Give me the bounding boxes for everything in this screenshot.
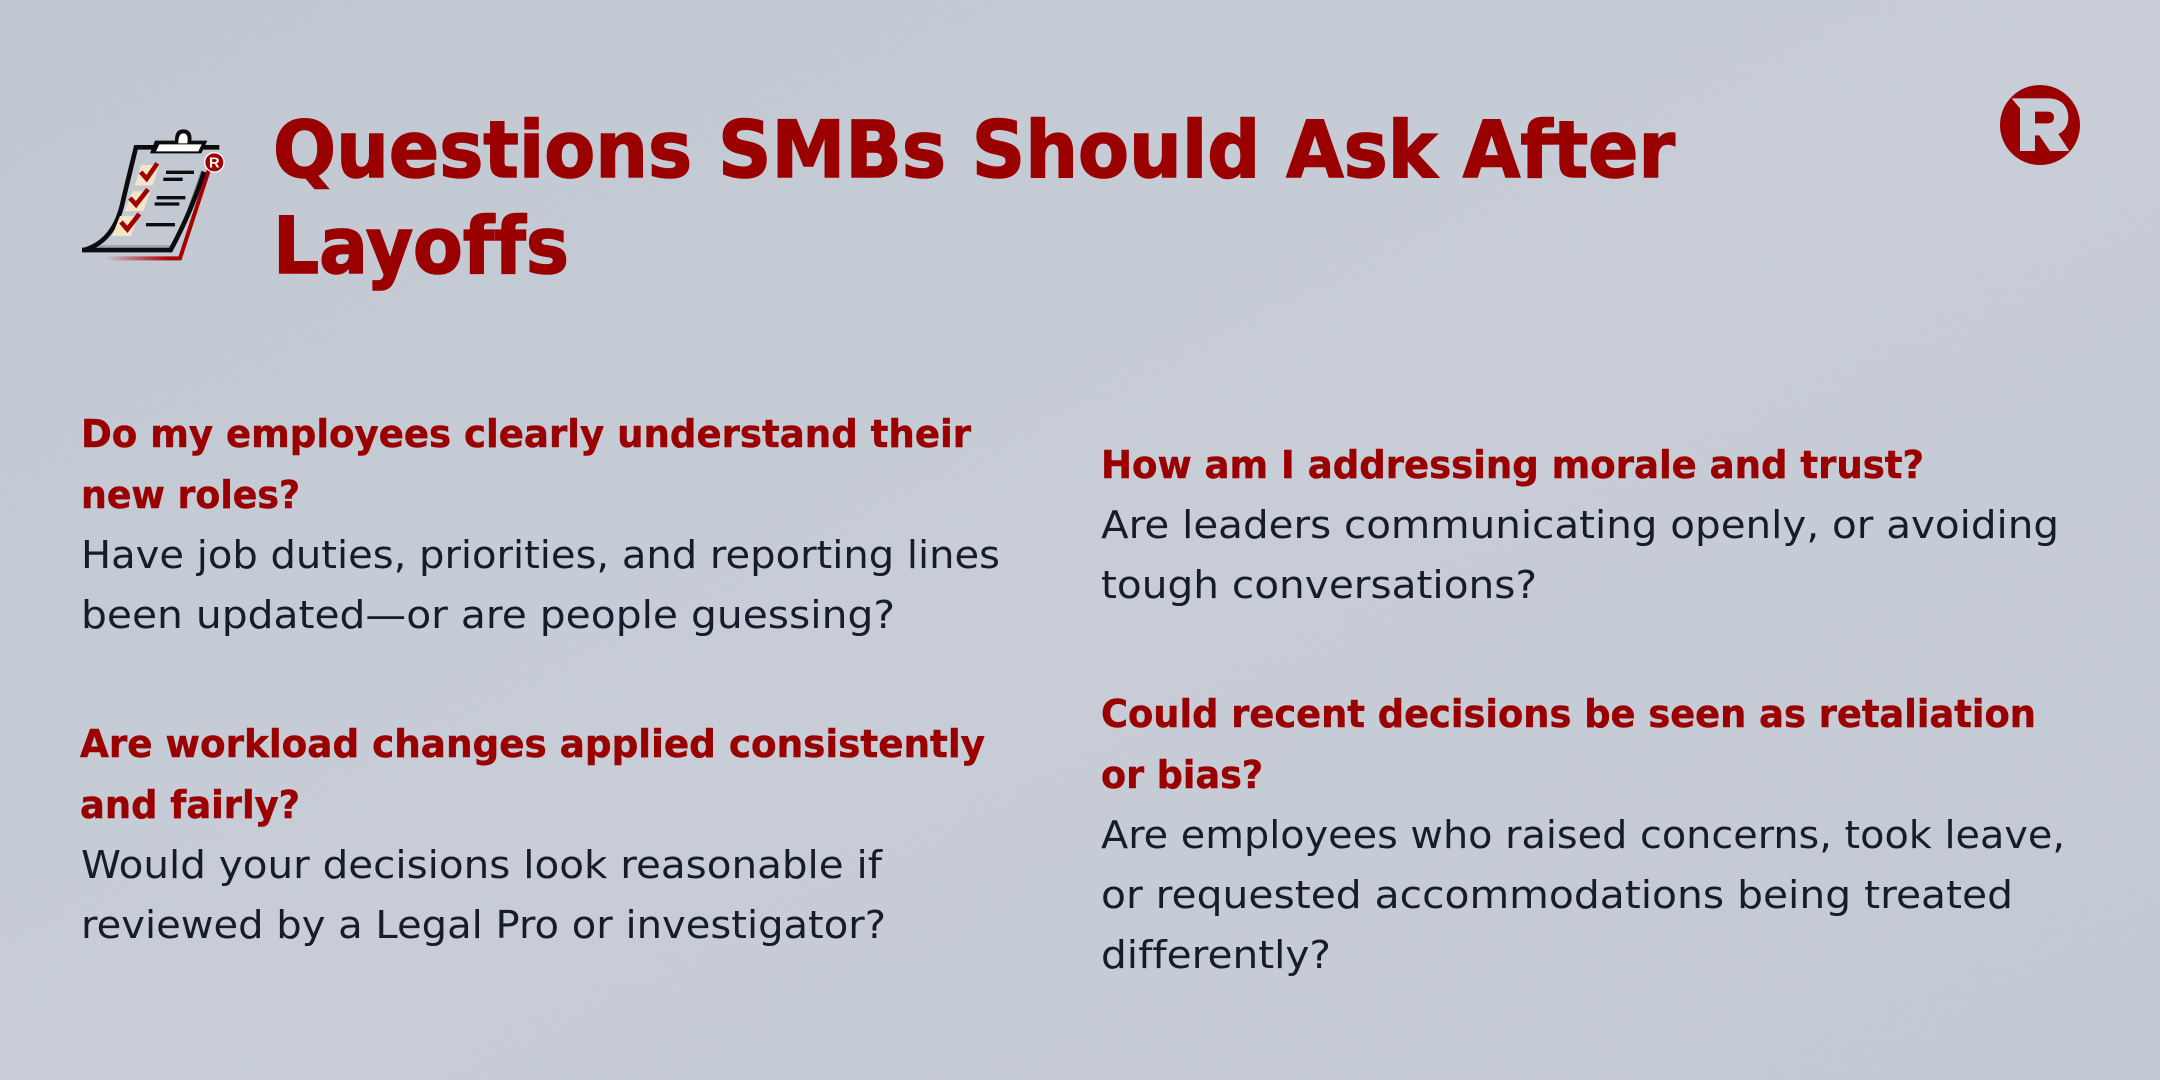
icon: clipboard checklist: R (209, 156, 220, 172)
text: retaliation detail (1101, 813, 2065, 978)
text: morale detail: tough conversations? (1101, 563, 1537, 608)
heading: retaliation: or bias? (1101, 753, 1263, 797)
text: workload detail: Would your decisions look reasonable if (81, 843, 884, 888)
text: morale detail: Are leaders communicating openly, or avoiding (1101, 503, 2059, 548)
text: retaliation detail: or requested accommodations being treated (1101, 873, 2013, 918)
title: Questions SMBs Should Ask After (273, 106, 1676, 196)
text: retaliation detail: differently? (1101, 933, 1331, 978)
heading: workload: Are workload changes applied consistently (80, 722, 985, 766)
heading: roles: new roles? (81, 473, 300, 517)
text: roles detail: Have job duties, priorities, and reporting lines (81, 533, 1000, 578)
panel: retaliation question (1101, 692, 2065, 978)
text: roles detail: been updated—or are people guessing? (81, 593, 895, 638)
heading: roles: Do my employees clearly understand their (81, 412, 971, 456)
text: retaliation detail: Are employees who raised concerns, took leave, (1101, 813, 2065, 858)
heading: workload: and fairly? (80, 783, 300, 827)
panel: workload question (80, 722, 985, 948)
icon: clipboard checklist (82, 129, 224, 258)
heading: workload (80, 722, 985, 827)
text: roles detail (81, 533, 1000, 638)
heading: retaliation: Could recent decisions be seen as retaliation (1101, 692, 2036, 736)
title: Layoffs (273, 202, 569, 292)
logo: R badge (2000, 85, 2080, 165)
panel: morale question (1101, 443, 2059, 608)
heading: morale: How am I addressing morale and trust? (1101, 443, 1924, 487)
panel: clear roles question (81, 412, 1000, 638)
text: morale detail (1101, 503, 2059, 608)
heading: roles (81, 412, 971, 517)
text: workload detail: reviewed by a Legal Pro or investigator? (81, 903, 886, 948)
title (273, 106, 1676, 292)
text: workload detail (81, 843, 886, 948)
heading: retaliation (1101, 692, 2036, 797)
